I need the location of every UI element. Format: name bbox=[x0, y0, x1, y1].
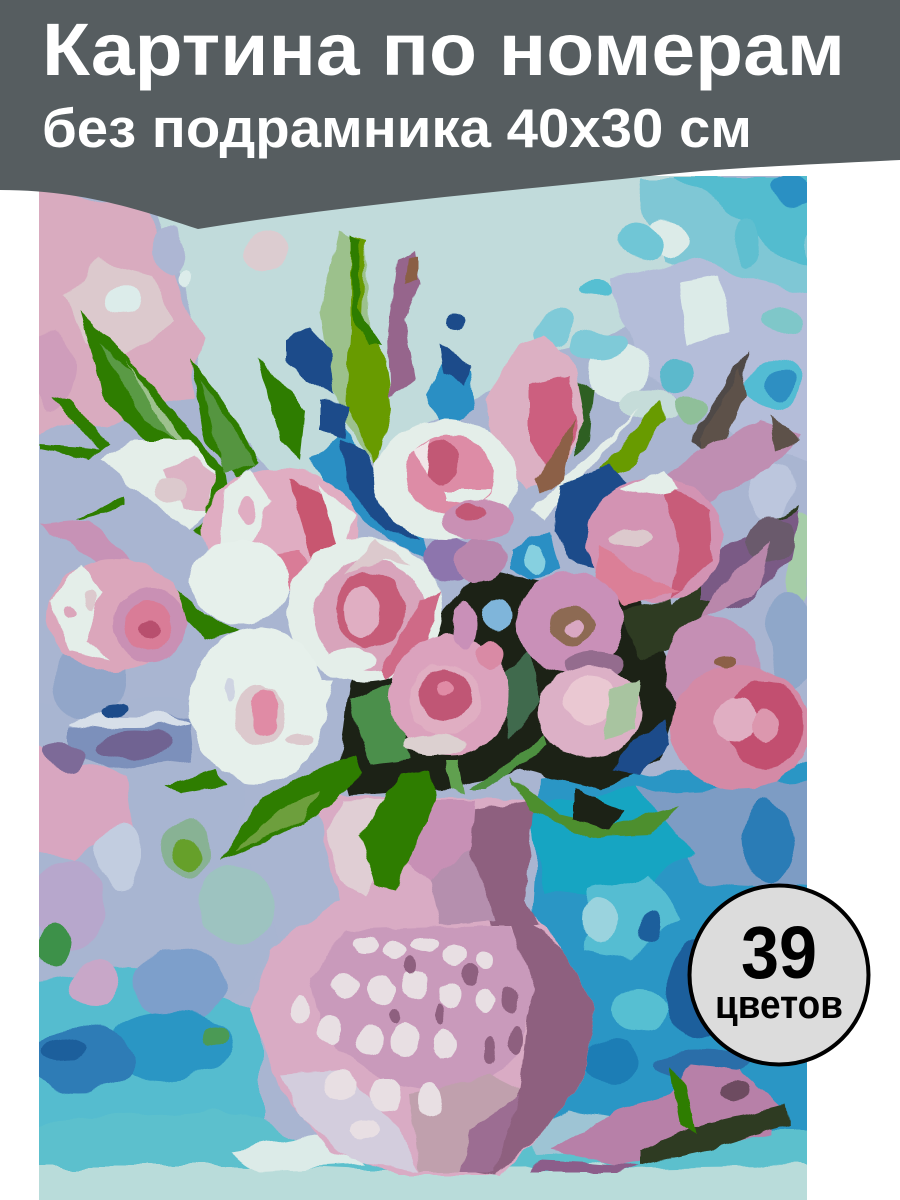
white tulip left bbox=[100, 440, 215, 530]
header ribbon bbox=[0, 0, 900, 229]
rose upper left bbox=[202, 468, 358, 592]
rose left bbox=[47, 559, 186, 671]
badge: 39 colours: 39 bbox=[741, 911, 817, 994]
dark foliage behind bouquet bbox=[340, 350, 800, 795]
lavender sprigs bbox=[40, 250, 800, 620]
vase shadow marks bbox=[389, 957, 523, 1064]
vase pattern bbox=[290, 937, 495, 1140]
blue flowers bbox=[103, 315, 670, 775]
subtitle: без подрамника 40х30 см bbox=[42, 97, 752, 159]
painting bbox=[20, 160, 830, 1200]
vase bbox=[250, 795, 595, 1175]
white rose lower left bbox=[190, 627, 335, 783]
large centre rose bbox=[287, 538, 443, 682]
painted background bbox=[20, 160, 830, 1200]
lilac branch bottom right bbox=[530, 1065, 790, 1172]
badge: 39 colours bbox=[690, 886, 868, 1064]
rose top centre bbox=[373, 420, 517, 540]
lilac rose middle bbox=[516, 572, 625, 679]
badge: 39 colours: цветов bbox=[715, 983, 843, 1027]
tulip top bbox=[485, 335, 585, 495]
tulip and roses bbox=[47, 335, 810, 790]
white rose behind bbox=[190, 540, 290, 624]
rose centre lower bbox=[390, 601, 510, 755]
rose far right bbox=[664, 616, 810, 790]
title: Картина по номерам bbox=[42, 8, 845, 91]
leaves bbox=[40, 232, 680, 890]
rose right upper bbox=[587, 470, 723, 605]
rose right lower bbox=[538, 666, 642, 758]
